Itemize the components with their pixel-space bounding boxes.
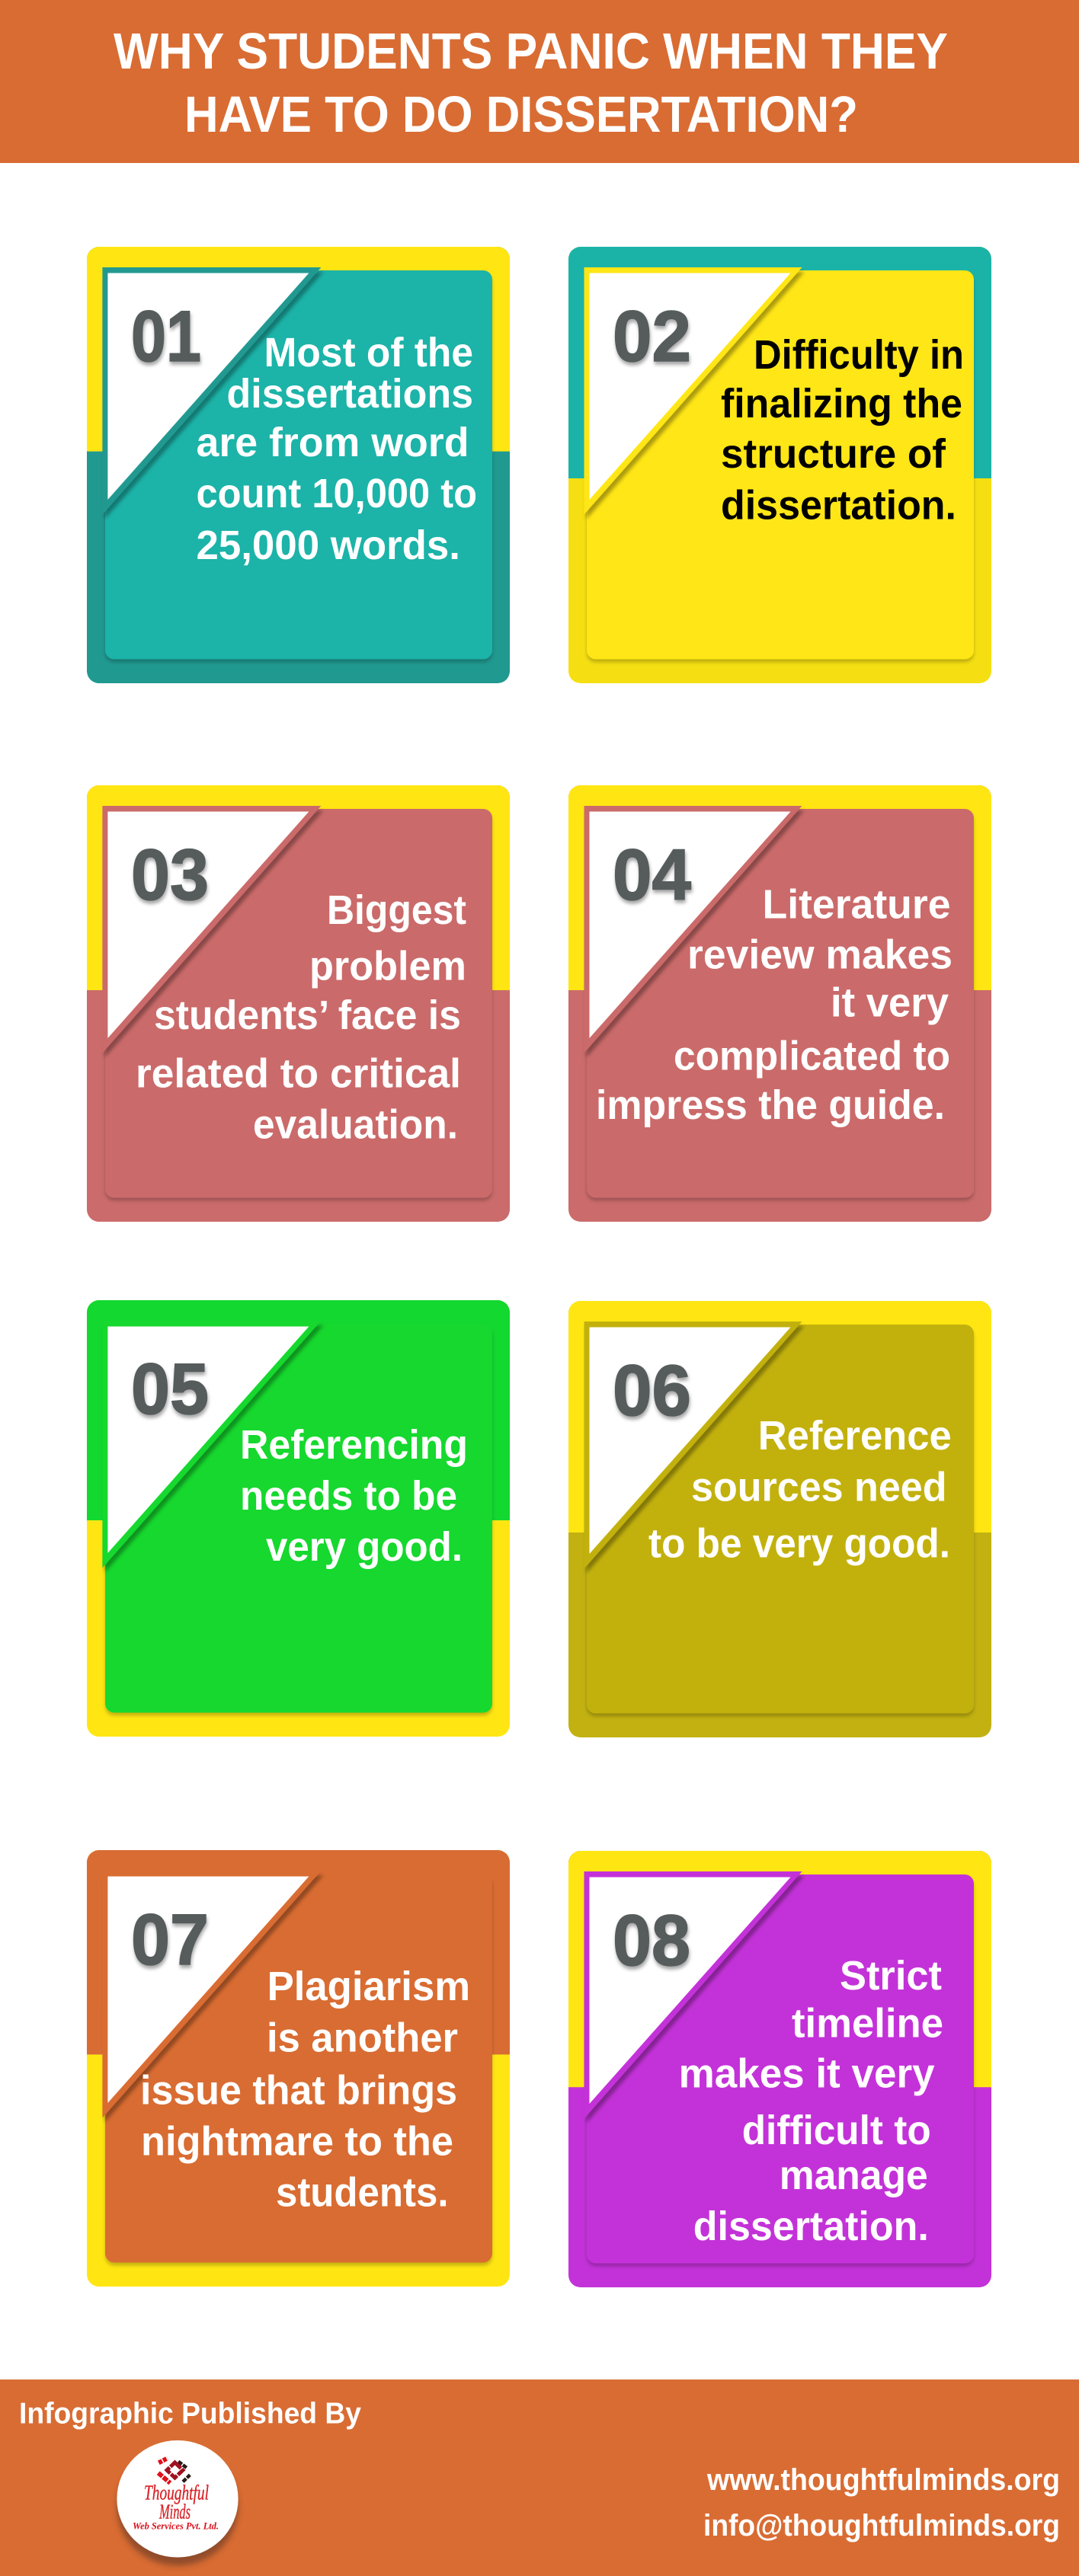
text: card 02: finalizing the	[721, 381, 962, 427]
logo text: Thoughtful	[144, 2482, 209, 2504]
number triangle 02	[584, 267, 802, 515]
text: card 01: count 10,000 to	[197, 471, 477, 516]
text: card 01: dissertations	[227, 371, 473, 417]
text: card 07: is another	[267, 2015, 458, 2061]
text: card 07	[140, 1964, 470, 2215]
logo badge	[117, 2440, 239, 2558]
panel: card 03	[87, 785, 510, 1222]
number 03: 03	[131, 835, 209, 916]
text: card 05: very good.	[266, 1524, 463, 1570]
text: card 02: Difficulty in	[754, 332, 964, 378]
header banner	[0, 0, 1079, 163]
text: card 04: impress the guide.	[596, 1082, 945, 1128]
text: card 04: it very	[831, 980, 949, 1026]
number triangle 05	[102, 1321, 321, 1568]
text: card 05: Referencing	[240, 1422, 468, 1468]
number 04: 04	[613, 835, 691, 916]
text: card 08: timeline	[792, 2000, 943, 2046]
text: card 07: Plagiarism	[267, 1964, 470, 2009]
number 06: 06	[613, 1350, 691, 1431]
logo text: Minds	[158, 2500, 191, 2523]
panel: card 05	[87, 1300, 510, 1737]
text: card 08: dissertation.	[693, 2204, 929, 2249]
number triangle 08	[584, 1871, 802, 2119]
text: card 04: review makes	[687, 932, 953, 977]
text: card 03: Biggest	[327, 887, 466, 933]
number 05: 05	[131, 1349, 209, 1430]
number triangle 04	[584, 806, 802, 1053]
title: WHY STUDENTS PANIC WHEN THEY	[114, 23, 948, 80]
text: card 08	[679, 1953, 943, 2249]
text: card 03: problem	[309, 944, 466, 989]
text: card 03: related to critical	[136, 1051, 461, 1097]
text: card 08: makes it very	[679, 2050, 935, 2096]
panel: card 08	[568, 1851, 991, 2287]
text: card 03: evaluation.	[253, 1101, 458, 1147]
text: card 01: 25,000 words.	[197, 523, 460, 568]
text: card 03: students’ face is	[154, 992, 461, 1038]
number 08: 08	[613, 1900, 690, 1981]
logo text: Web Services Pvt. Ltd.	[133, 2520, 219, 2532]
panel: card 04	[568, 785, 991, 1222]
text: card 06: sources need	[691, 1464, 946, 1510]
text: card 02: structure of	[721, 431, 946, 477]
number triangle 07	[102, 1871, 321, 2117]
text: card 04: Literature	[762, 882, 951, 928]
text: card 04: complicated to	[674, 1034, 950, 1079]
icon: logo mark	[158, 2458, 190, 2483]
title	[114, 23, 948, 143]
text: card 02: dissertation.	[721, 483, 956, 529]
text: card 08: difficult to	[742, 2108, 931, 2153]
panel: card 01	[87, 247, 510, 683]
number triangle 06	[584, 1322, 802, 1569]
contact: email: info@thoughtfulminds.org	[703, 2509, 1060, 2542]
number triangle 03	[102, 806, 321, 1053]
text: card 02	[721, 332, 964, 529]
text: card 05	[240, 1422, 468, 1570]
logo text	[133, 2482, 219, 2532]
text: card 01: are from word	[197, 420, 469, 465]
text: card 06: to be very good.	[648, 1520, 950, 1566]
text: card 01	[197, 330, 477, 568]
panel: card 06	[568, 1301, 991, 1737]
panel: card 07	[87, 1850, 510, 2287]
number 07: 07	[131, 1900, 209, 1980]
text: card 07: issue that brings	[140, 2067, 457, 2113]
number 01: 01	[131, 296, 201, 377]
number triangle 01	[102, 267, 321, 515]
text: card 07: nightmare to the	[141, 2119, 453, 2165]
number 02: 02	[613, 296, 691, 377]
text: card 03	[136, 887, 466, 1147]
text: card 04	[596, 882, 953, 1128]
text: card 05: needs to be	[240, 1473, 457, 1519]
text: card 06	[648, 1413, 952, 1566]
title: HAVE TO DO DISSERTATION?	[184, 86, 858, 143]
contact: website: www.thoughtfulminds.org	[706, 2463, 1060, 2497]
panel: card 02	[568, 247, 991, 683]
text: card 06: Reference	[758, 1413, 952, 1459]
text: card 08: Strict	[840, 1953, 942, 1999]
publisher heading: Infographic Published By	[19, 2398, 361, 2430]
text: card 01: Most of the	[264, 330, 473, 376]
text: card 08: manage	[780, 2153, 928, 2198]
text: card 07: students.	[276, 2169, 448, 2215]
footer banner	[0, 2379, 1079, 2576]
